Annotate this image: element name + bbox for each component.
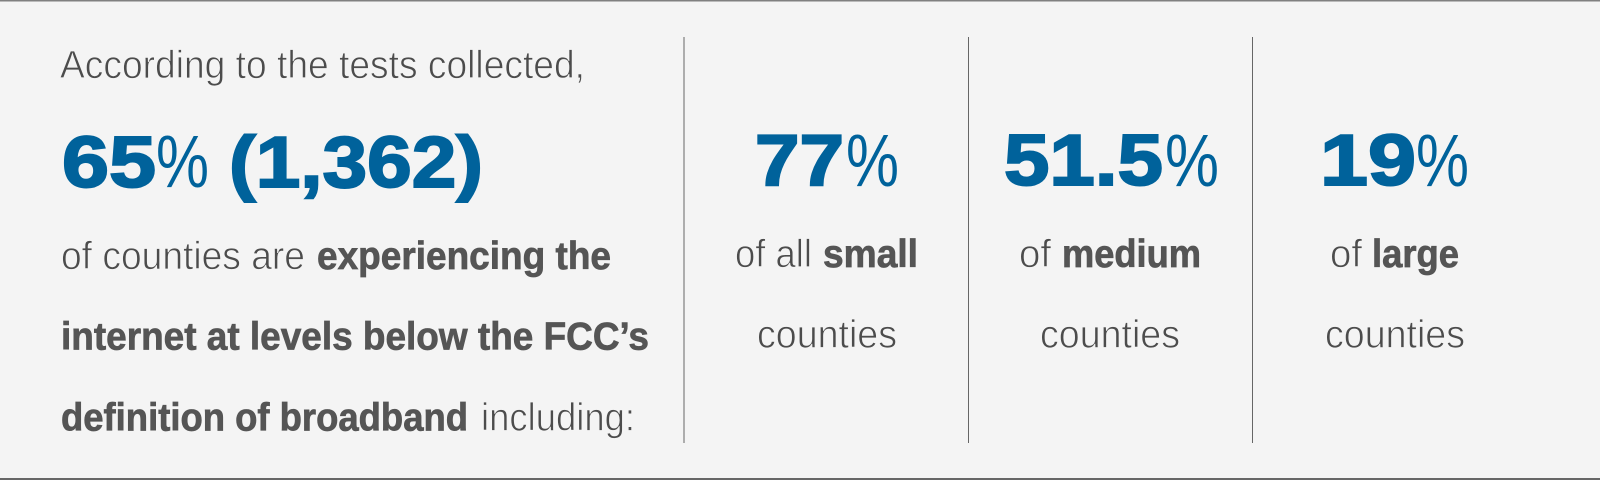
statistic: 77%: 77 bbox=[755, 121, 844, 201]
description text: of counties are bbox=[61, 235, 305, 278]
label: of all small counties bbox=[735, 233, 918, 356]
description text: internet at levels below the FCC’s bbox=[61, 316, 649, 358]
label: of large counties: large bbox=[1372, 233, 1459, 276]
statistic: 77% bbox=[755, 119, 899, 202]
headline statistic: 65% (1,362): (1,362) bbox=[229, 123, 483, 203]
statistic: 19%: 19 bbox=[1320, 121, 1416, 201]
label: of medium counties bbox=[1019, 233, 1201, 356]
statistic: 19% bbox=[1320, 119, 1469, 202]
statistic: 51.5% bbox=[1004, 119, 1219, 202]
intro text: According to the tests collected, bbox=[60, 44, 585, 87]
headline statistic: 65% (1,362): 65 bbox=[62, 123, 156, 203]
label: of medium counties: medium bbox=[1062, 233, 1201, 276]
label: of large counties bbox=[1325, 233, 1465, 356]
headline statistic: 65% (1,362) bbox=[62, 120, 483, 203]
label: of large counties: counties bbox=[1325, 314, 1465, 356]
statistic: 51.5%: % bbox=[1165, 119, 1219, 202]
label: of all small counties: small bbox=[823, 233, 918, 276]
statistic: 77%: % bbox=[846, 119, 899, 202]
panel: small counties bbox=[735, 119, 918, 356]
label: of medium counties: counties bbox=[1040, 314, 1180, 356]
description text: including: bbox=[481, 396, 635, 440]
label: of large counties: of bbox=[1330, 233, 1362, 276]
statistic: 51.5%: 51.5 bbox=[1004, 121, 1163, 201]
description text: experiencing the bbox=[317, 235, 611, 278]
headline statistic: 65% (1,362): % bbox=[156, 120, 209, 203]
label: of medium counties: of bbox=[1019, 233, 1051, 276]
description text: definition of broadband bbox=[61, 396, 468, 440]
panel: medium counties bbox=[1004, 119, 1219, 356]
panel: overall county statistic bbox=[60, 44, 649, 440]
panel: large counties bbox=[1320, 119, 1469, 356]
label: of all small counties: counties bbox=[757, 314, 897, 356]
label: of all small counties: of all bbox=[735, 233, 812, 276]
description text bbox=[61, 235, 649, 440]
statistic: 19%: % bbox=[1416, 119, 1469, 202]
